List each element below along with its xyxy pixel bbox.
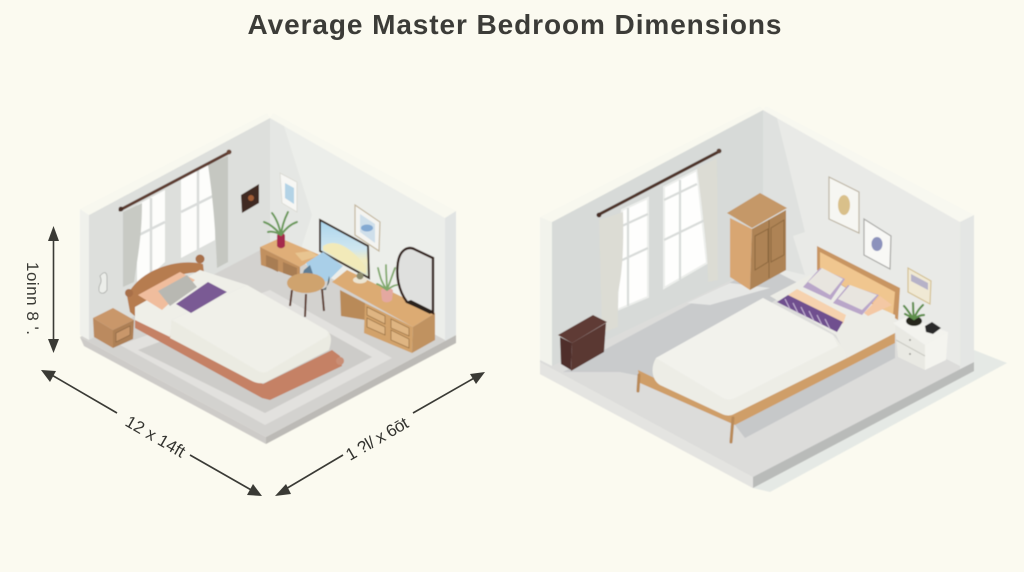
right room floor slab	[540, 265, 974, 488]
peach runner	[788, 289, 846, 324]
peach pillow	[138, 272, 195, 310]
red vase with plant	[264, 212, 297, 248]
sheet	[135, 270, 247, 337]
depth arrow: right dimension	[275, 372, 485, 496]
left bed	[125, 254, 344, 400]
right room curtains	[599, 158, 718, 333]
wardrobe	[727, 193, 787, 290]
blanket	[170, 285, 331, 383]
long desk and dresser	[332, 270, 435, 353]
right room curtain rod	[597, 149, 721, 217]
grey bolster	[158, 275, 197, 306]
width arrow: left dimension	[41, 370, 262, 496]
small bowl	[353, 272, 367, 284]
pillow 1	[803, 268, 845, 300]
dark wall picture	[241, 184, 259, 213]
right room side wall	[763, 106, 974, 369]
pillow 2	[833, 285, 879, 315]
foot knobs	[336, 357, 344, 365]
blanket	[653, 298, 847, 416]
round table	[287, 273, 325, 317]
dark chest	[558, 315, 607, 371]
headboard	[127, 262, 204, 318]
cast shadow outside room	[753, 350, 1007, 492]
height arrow	[48, 226, 59, 353]
blue wall picture	[280, 173, 297, 212]
dresser plant	[377, 265, 397, 302]
right bed	[638, 246, 900, 442]
headboard	[817, 246, 900, 320]
right bedroom illustration	[540, 106, 1007, 492]
framed whale picture	[355, 205, 380, 251]
oval mirror	[397, 248, 433, 314]
left room curtain rod	[119, 150, 231, 211]
left room curtains	[123, 156, 228, 287]
peach pillow edge	[864, 296, 892, 316]
floor shadow	[563, 265, 800, 380]
left bedroom illustration	[80, 113, 456, 444]
bed frame	[638, 331, 895, 425]
left nightstand	[93, 308, 134, 348]
sun patch	[687, 283, 770, 305]
left room side wall	[270, 113, 456, 341]
left room floor slab	[80, 243, 456, 444]
chair with blue throw	[302, 252, 343, 290]
left room rug	[120, 290, 392, 425]
title: Average Master Bedroom Dimensions	[248, 9, 782, 40]
nightstand plant	[904, 303, 924, 326]
purple pillow	[176, 282, 227, 313]
height label: 1oinn 8 '.	[23, 262, 42, 335]
left dimension label: 12 x 14ft	[122, 412, 189, 462]
left room windows	[137, 162, 215, 288]
right room window wall	[540, 106, 763, 366]
sheet	[770, 275, 895, 358]
landscape poster	[320, 220, 369, 278]
right room windows	[617, 170, 707, 310]
wall outlet icon	[99, 273, 107, 293]
framed wall art 3	[908, 268, 931, 304]
black telephone	[925, 322, 941, 334]
low shelf desk	[260, 238, 320, 279]
bed frame	[135, 317, 342, 400]
purple runner	[777, 295, 843, 332]
right dimension label: 1 ?l/ x 6ōt	[342, 413, 412, 464]
left room window wall	[80, 113, 270, 340]
framed wall art 2	[864, 219, 891, 269]
bed shadow on floor	[735, 343, 895, 438]
white nightstand	[893, 317, 948, 370]
framed wall art 1	[829, 177, 859, 233]
